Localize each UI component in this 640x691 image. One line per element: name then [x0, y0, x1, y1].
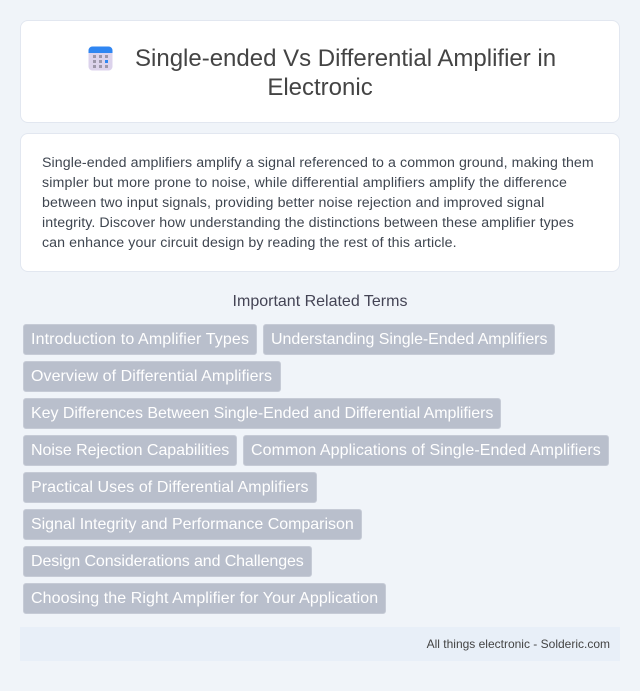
tag — [243, 435, 609, 466]
tag: Choosing the Right Amplifier for Your Application — [31, 590, 378, 607]
tag: Overview of Differential Amplifiers — [31, 368, 272, 385]
icon: calendar — [88, 46, 112, 70]
tag — [263, 324, 555, 355]
tag: Introduction to Amplifier Types — [31, 331, 249, 348]
title: Single-ended Vs Differential Amplifier in — [135, 45, 556, 72]
intro line 1: Single-ended amplifiers amplify a signal referenced to a common ground, making them — [42, 155, 594, 171]
intro line 4: integrity. Discover how understanding the distinctions between these amplifier types — [42, 215, 574, 231]
footer — [20, 627, 620, 661]
tag: Signal Integrity and Performance Comparison — [31, 516, 354, 533]
intro panel — [20, 133, 620, 272]
title — [135, 45, 556, 101]
footer: All things electronic - Solderic.com — [427, 637, 610, 651]
tag — [23, 509, 362, 540]
section heading: Important Related Terms — [233, 293, 407, 310]
tag: Common Applications of Single-Ended Amplifiers — [251, 442, 601, 459]
tag — [23, 583, 386, 614]
tag — [23, 361, 281, 392]
tag — [23, 435, 237, 466]
tag: Design Considerations and Challenges — [31, 553, 304, 570]
tag: Understanding Single-Ended Amplifiers — [271, 331, 547, 348]
tag: Noise Rejection Capabilities — [31, 442, 229, 459]
tag: Key Differences Between Single-Ended and Differential Amplifiers — [31, 405, 493, 422]
title: Electronic — [267, 74, 373, 101]
intro line 2: simpler but more prone to noise, while differential amplifiers amplify the difference — [42, 175, 567, 191]
intro line 3: between two input signals, providing better noise rejection and improved signal — [42, 195, 544, 211]
intro line 5: can enhance your circuit design by reading the rest of this article. — [42, 235, 457, 251]
tag list — [23, 324, 609, 614]
header panel — [20, 20, 620, 123]
tag — [23, 472, 317, 503]
tag — [23, 324, 257, 355]
tag — [23, 546, 312, 577]
tag: Practical Uses of Differential Amplifiers — [31, 479, 309, 496]
tag — [23, 398, 501, 429]
